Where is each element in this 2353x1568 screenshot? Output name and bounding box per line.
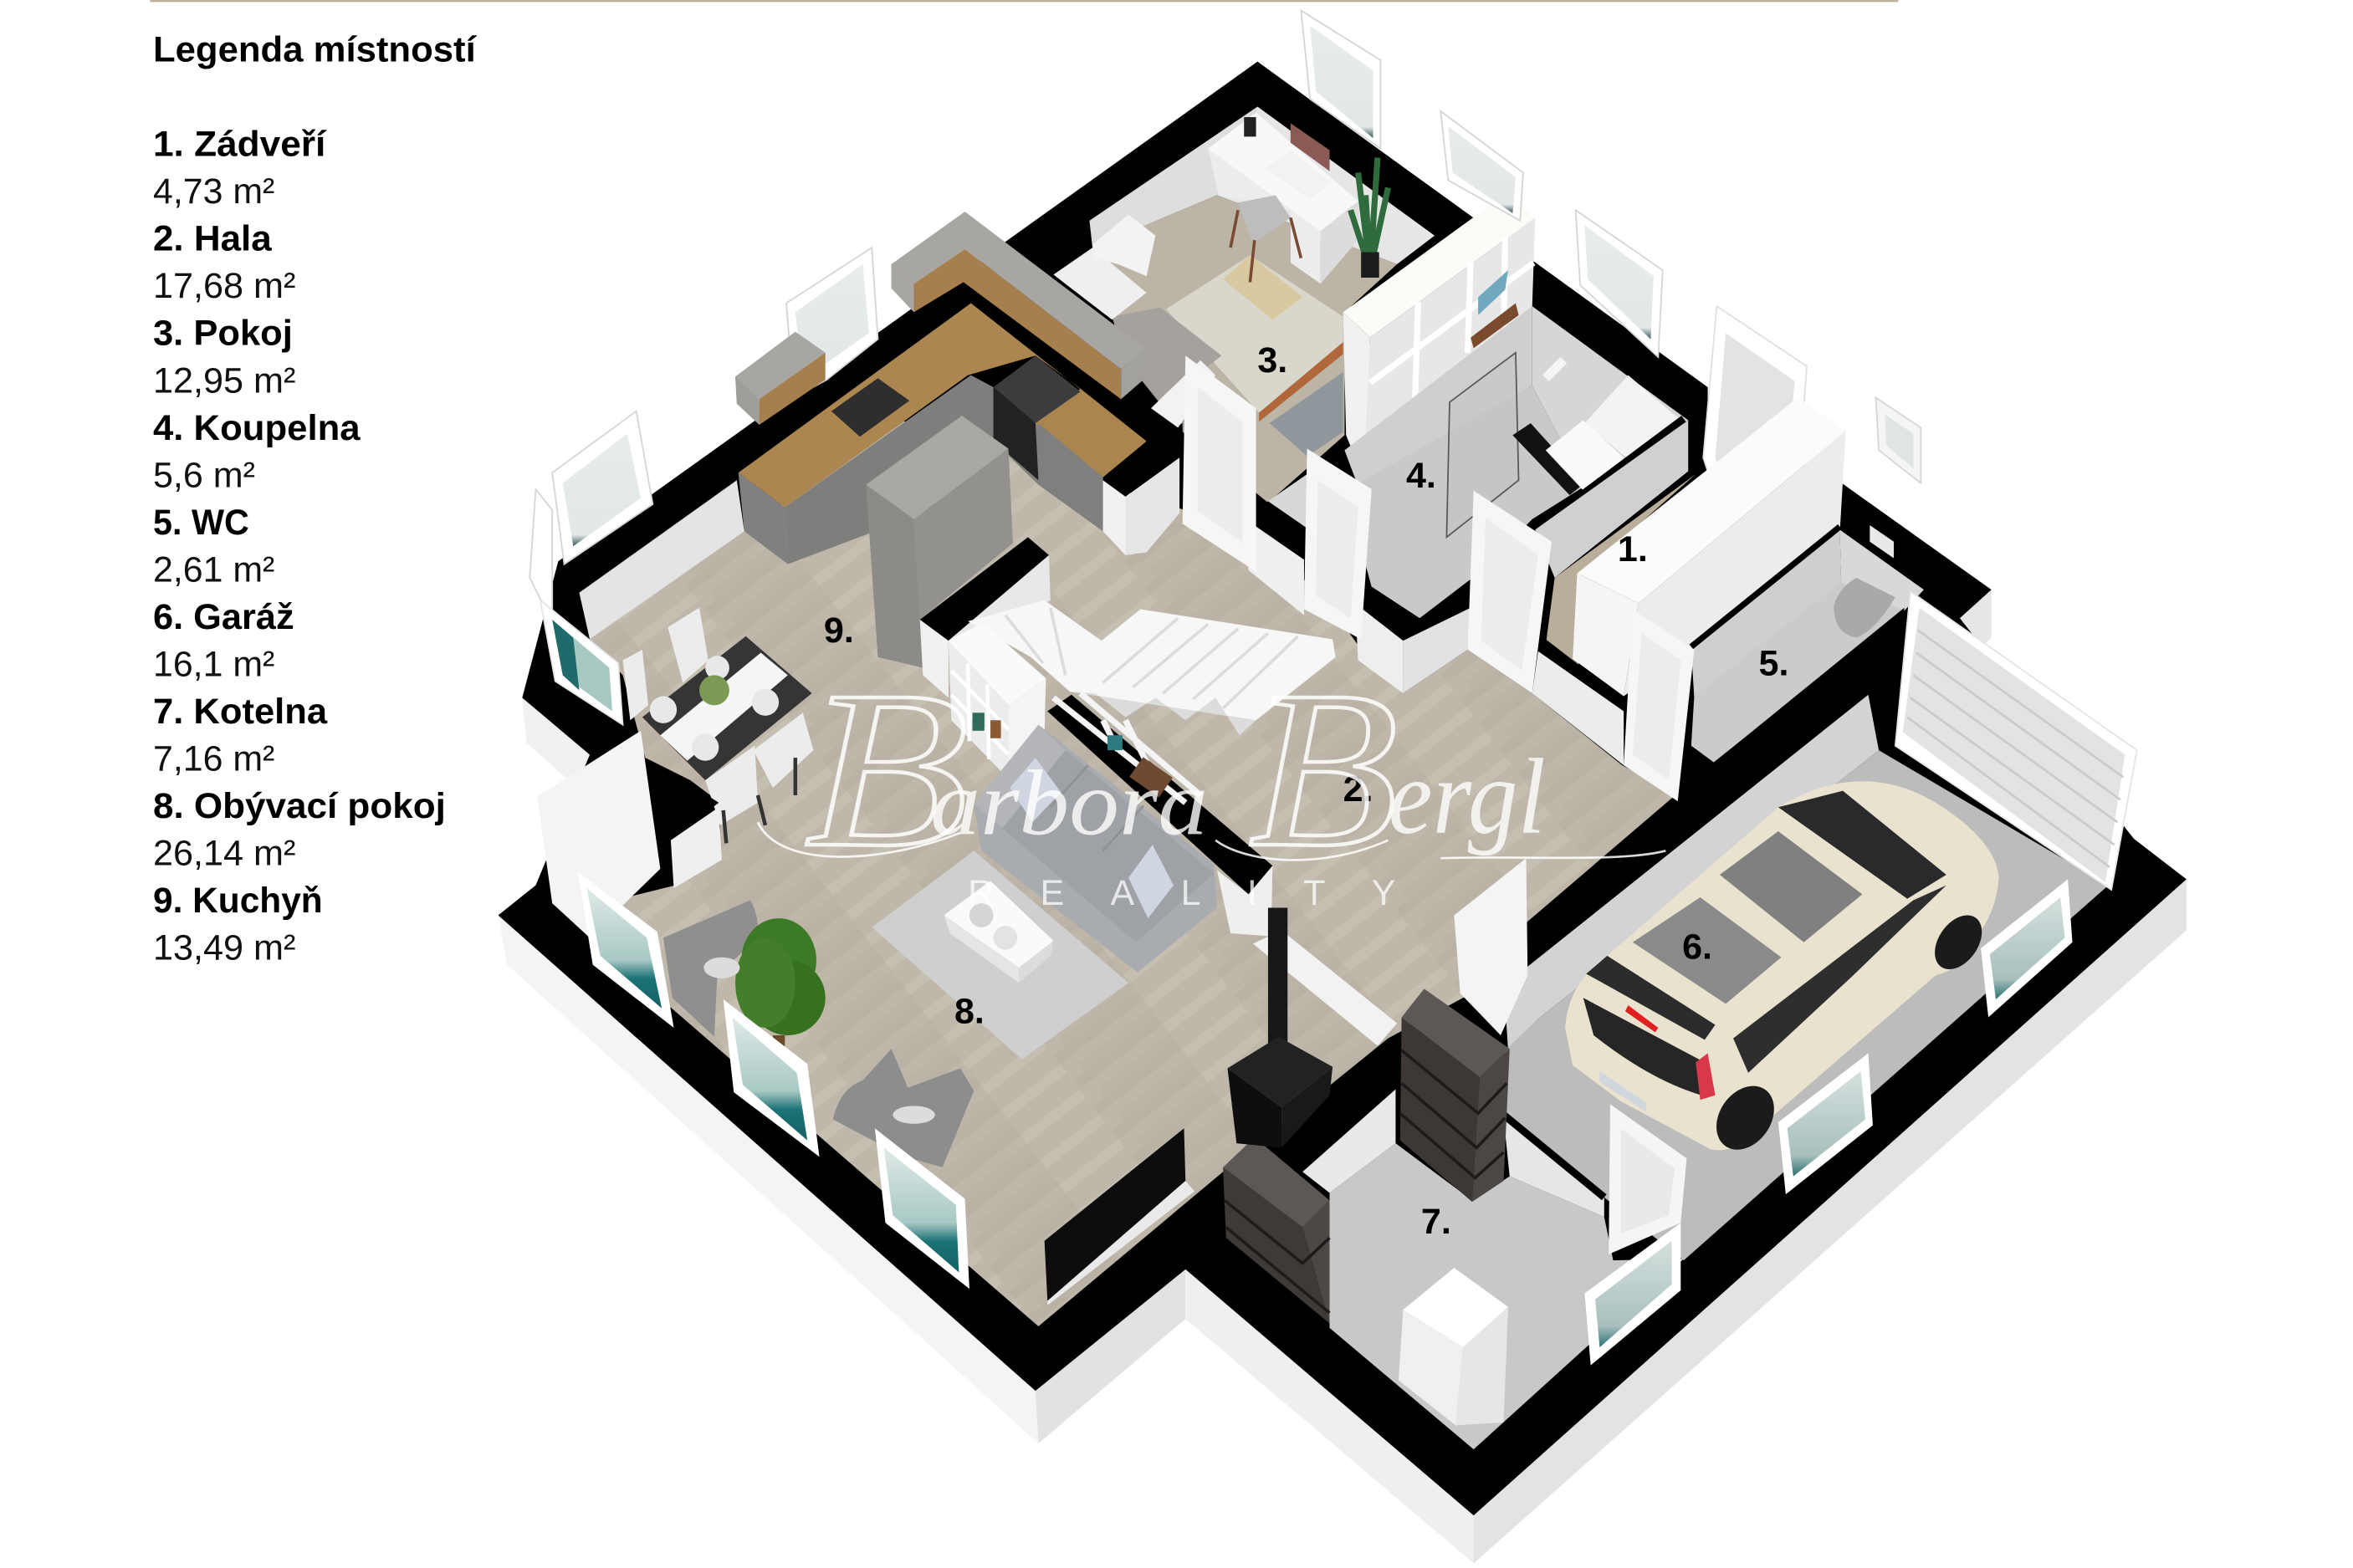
back window 4 xyxy=(1440,111,1523,221)
room number labels xyxy=(824,340,1788,1242)
legend item 9: 9. Kuchyň xyxy=(153,881,323,921)
kitchen end walls xyxy=(1103,360,1215,555)
black wall tops xyxy=(499,62,2187,1515)
kitchen back wall xyxy=(579,480,744,639)
garage window 3 xyxy=(1584,1223,1680,1366)
front wheel xyxy=(1925,907,1992,978)
shower glass xyxy=(1446,353,1519,537)
label 9: 9. xyxy=(824,610,854,651)
room legend xyxy=(153,30,478,968)
armchair pillow xyxy=(703,958,739,978)
brake light xyxy=(1625,1005,1658,1032)
label 3: 3. xyxy=(1257,340,1287,381)
small window xyxy=(1876,398,1921,483)
throw pillow xyxy=(1128,845,1174,918)
door: garage to boiler room xyxy=(1609,1105,1686,1254)
garage door xyxy=(1895,591,2137,890)
kitchen unit xyxy=(735,212,1215,667)
back window 3 xyxy=(1301,11,1380,149)
wall stub left of bathroom xyxy=(1246,501,1304,615)
front window 1 xyxy=(578,871,674,1028)
legend item 5 xyxy=(153,503,274,590)
toilet xyxy=(1834,578,1895,638)
wood stove xyxy=(1227,908,1333,1148)
side window narrow xyxy=(529,489,552,623)
label 4: 4. xyxy=(1406,456,1436,496)
watermark: Barbora Bergl Reality: ergl xyxy=(1388,737,1546,856)
bedroom floor xyxy=(1092,195,1397,503)
chairs xyxy=(623,608,813,825)
legend item 6: 6. Garáž xyxy=(153,597,294,637)
bathroom back walls xyxy=(1344,306,1688,486)
legend item 9 xyxy=(153,881,323,968)
armchair upper xyxy=(663,901,758,1037)
white cabinet xyxy=(1573,398,1846,697)
dining area xyxy=(623,608,813,843)
front window 3 xyxy=(875,1128,969,1289)
watermark: Barbora Bergl Reality: B xyxy=(1249,645,1399,894)
oven xyxy=(994,387,1038,480)
legend item 3: 12,95 m² xyxy=(153,360,295,401)
legend item 4 xyxy=(153,408,361,495)
potted plant xyxy=(1351,158,1388,278)
exterior side walls xyxy=(499,590,2187,1563)
legend heading: Legenda místností xyxy=(153,30,478,70)
legend item 1: 4,73 m² xyxy=(153,171,274,212)
legend item 7: 7. Kotelna xyxy=(153,692,328,732)
tall unit xyxy=(866,416,1013,667)
upper cabinets large xyxy=(892,212,1145,399)
bathroom floor tiles xyxy=(1351,386,1584,618)
television xyxy=(1045,1128,1194,1305)
table plates xyxy=(650,656,779,761)
sofa xyxy=(974,725,1217,973)
door: main entrance side xyxy=(537,731,660,937)
stairwell wall stub xyxy=(920,537,1051,697)
armchair pillow xyxy=(893,1106,935,1124)
garage window 1 xyxy=(1981,879,2073,1017)
flush plate xyxy=(1870,525,1894,559)
sunroof rear xyxy=(1633,897,1781,1004)
car xyxy=(1565,781,1999,1161)
decorative rack xyxy=(1053,693,1200,803)
WC floor xyxy=(1691,582,1905,762)
redraw small upper cabinet front xyxy=(735,332,826,425)
white wall strip xyxy=(1253,930,1397,1046)
entrance door xyxy=(1703,306,1807,480)
door: WC xyxy=(1624,609,1694,801)
garage inner wall xyxy=(1505,695,1879,1050)
chair xyxy=(1230,195,1301,282)
roof rear glass xyxy=(1586,956,1716,1039)
tail light xyxy=(1696,1054,1716,1100)
dark shelving unit upper xyxy=(1400,988,1510,1202)
bookcase xyxy=(949,623,1046,779)
bathroom partition xyxy=(1535,419,1684,529)
throw pillow xyxy=(1010,758,1061,822)
watermark: Barbora Bergl Reality: B xyxy=(805,645,969,894)
legend item 2 xyxy=(153,219,295,306)
computer xyxy=(1265,123,1331,200)
door: garage from hall xyxy=(1454,858,1527,1035)
dining window xyxy=(540,600,623,725)
legend item 4: 5,6 m² xyxy=(153,455,255,495)
boiler room wall xyxy=(1302,1090,1395,1193)
bedroom rug xyxy=(1166,255,1343,457)
WC walls xyxy=(1691,529,1924,697)
bedroom walls xyxy=(1089,107,1435,264)
garage window 2 xyxy=(1778,1054,1873,1194)
car body xyxy=(1565,781,1999,1150)
front window 2 xyxy=(724,999,820,1157)
sink xyxy=(831,378,909,437)
cooktop xyxy=(994,355,1081,423)
back window 2 xyxy=(786,248,877,398)
legend item 7 xyxy=(153,692,328,779)
door: bathroom right xyxy=(1468,491,1552,693)
boiler room floor xyxy=(1329,1143,1684,1449)
wall end behind sofa xyxy=(1217,866,1272,937)
windscreen xyxy=(1778,791,1946,899)
dining table xyxy=(642,636,812,780)
garage side wall band xyxy=(1527,608,1905,968)
wardrobe shelving xyxy=(1343,192,1535,483)
left wall end beside entrance xyxy=(645,759,722,888)
desk xyxy=(1208,113,1358,283)
back window 1 xyxy=(552,411,652,564)
bed xyxy=(1053,248,1221,435)
legend item 6: 16,1 m² xyxy=(153,644,274,684)
wall patch between doors xyxy=(1268,474,1307,529)
label 2: 2. xyxy=(1343,769,1373,810)
dark shelving unit lower xyxy=(1223,1137,1329,1323)
corridor floor xyxy=(1546,474,1696,667)
wall stub below bathroom xyxy=(1355,580,1471,693)
WC partition line xyxy=(1691,527,1839,646)
pen holder xyxy=(1244,117,1256,136)
legend item 8: 26,14 m² xyxy=(153,833,295,873)
watermark: Barbora Bergl Reality: REALITY xyxy=(968,873,1395,913)
floor plan xyxy=(499,11,2187,1563)
legend item 1 xyxy=(153,125,327,212)
corridor wall xyxy=(1535,420,1688,578)
tree xyxy=(735,918,826,1065)
worktop xyxy=(739,304,1147,508)
water heater xyxy=(1399,1268,1508,1425)
staircase xyxy=(968,600,1336,735)
legend item 6 xyxy=(153,597,294,684)
legend item 2: 2. Hala xyxy=(153,219,273,259)
legend item 9: 13,49 m² xyxy=(153,927,295,968)
watermark: Barbora Bergl Reality xyxy=(758,645,1665,913)
shower head xyxy=(1546,360,1563,378)
room 8: living room xyxy=(663,725,1333,1305)
legend item 8: 8. Obývací pokoj xyxy=(153,786,446,826)
wall behind sofa xyxy=(1047,695,1272,894)
hall partition wall xyxy=(1532,639,1624,765)
side windows xyxy=(1733,886,1946,1073)
legend item 3: 3. Pokoj xyxy=(153,314,293,354)
chair legs xyxy=(724,758,795,843)
upper cabinet small xyxy=(735,332,826,425)
room 7: boiler room xyxy=(1302,1090,1684,1449)
rug xyxy=(872,850,1128,1060)
partition wall to garage xyxy=(1504,1115,1604,1217)
label 1: 1. xyxy=(1618,529,1648,569)
label 5: 5. xyxy=(1759,643,1788,683)
back window 5 xyxy=(1576,210,1663,357)
legend item 2: 17,68 m² xyxy=(153,266,295,306)
legend item 3 xyxy=(153,314,295,401)
room 6: garage floor xyxy=(1504,750,2109,1260)
table runner xyxy=(660,653,788,761)
legend item 1: 1. Zádveří xyxy=(153,125,327,165)
flower vase xyxy=(699,675,729,705)
room 4: bathroom xyxy=(1246,306,1688,693)
door: bedroom xyxy=(1183,355,1256,572)
rear window xyxy=(1583,998,1701,1096)
legend item 8 xyxy=(153,786,446,873)
nightstand xyxy=(1092,215,1155,276)
room 5: WC xyxy=(1691,525,1924,762)
door: bathroom left xyxy=(1304,449,1372,639)
rear wheel xyxy=(1705,1075,1786,1161)
label 7: 7. xyxy=(1421,1202,1451,1242)
legend item 5: 5. WC xyxy=(153,503,249,543)
bathtub and basin xyxy=(1512,375,1680,495)
label 8: 8. xyxy=(954,992,985,1032)
wood floor: kitchen, living room and hall xyxy=(590,420,1678,1326)
lower cabinet fronts xyxy=(739,375,1103,564)
legend item 5: 2,61 m² xyxy=(153,549,274,590)
watermark: Barbora Bergl Reality: arbora xyxy=(930,753,1208,856)
legend item 4: 4. Koupelna xyxy=(153,408,361,448)
armchair lower xyxy=(833,1049,974,1167)
sunroof front xyxy=(1720,831,1862,942)
label 6: 6. xyxy=(1682,927,1712,968)
legend item 7: 7,16 m² xyxy=(153,738,274,779)
right base cabinets xyxy=(1038,423,1103,531)
room 1: entrance hall xyxy=(1532,306,1846,765)
worktop right section xyxy=(1036,389,1147,478)
licence plate xyxy=(1599,1071,1646,1111)
room 3: bedroom xyxy=(1053,107,1535,503)
coffee table xyxy=(944,881,1053,983)
